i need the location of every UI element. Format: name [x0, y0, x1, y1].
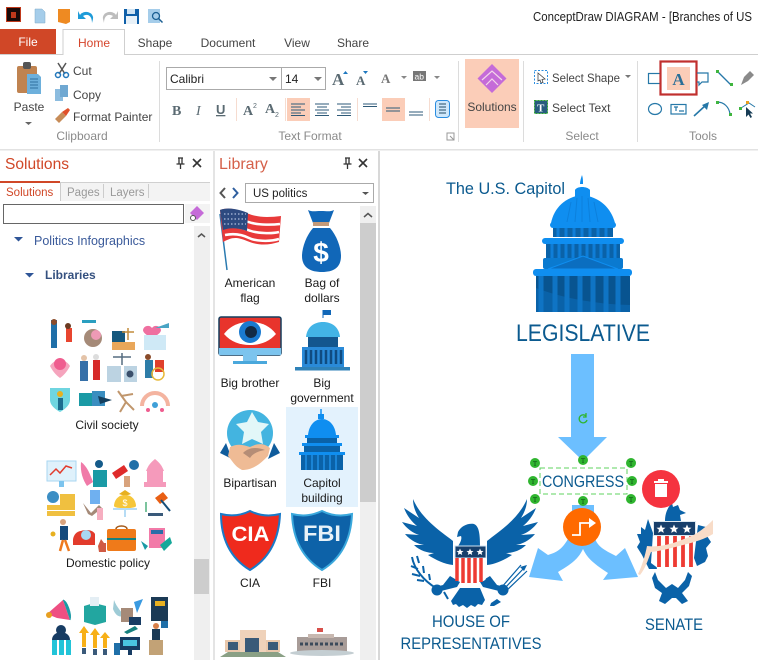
label: congress: CONGRESS — [542, 473, 624, 491]
icon: format painter — [55, 108, 70, 123]
text selection: congress: T — [629, 460, 634, 468]
item: federal building — [220, 630, 286, 657]
item: big government: Big — [313, 376, 331, 390]
font size selector — [282, 68, 326, 90]
grow and shrink font — [332, 70, 368, 89]
select group: Select Text — [552, 101, 611, 115]
item: capitol building selected: building — [301, 491, 343, 505]
label: house of representatives: REPRESENTATIVES — [400, 635, 542, 653]
scrollbar — [194, 226, 210, 660]
icon: copy — [55, 85, 68, 101]
icon: open book — [58, 9, 70, 24]
font colour and highlight — [381, 71, 440, 86]
item: FBI: FBI — [313, 576, 331, 590]
eagle head — [457, 524, 480, 546]
icon: ellipse tool — [648, 104, 662, 114]
panel: solutions — [0, 151, 213, 660]
icon: scissors — [56, 63, 68, 78]
grow and shrink font: A — [356, 73, 366, 88]
icon: arrow tool — [694, 102, 709, 116]
text selection: congress: T — [531, 478, 536, 486]
clipboard group: Clipboard — [56, 129, 108, 143]
library selector: US politics — [253, 188, 308, 200]
font colour and highlight: ab — [414, 72, 424, 82]
item: bag of dollars — [302, 210, 341, 305]
item: big brother — [219, 317, 281, 390]
icon: new document — [35, 9, 45, 23]
library: foreign policy set — [46, 597, 168, 655]
icon: rectangle tool — [648, 74, 660, 84]
navigation chevrons — [220, 188, 238, 198]
clipboard group: Cut — [73, 64, 92, 78]
style buttons: B — [172, 104, 181, 119]
panel tabs: Pages — [67, 187, 100, 199]
library: domestic policy: Domestic policy — [66, 556, 150, 570]
panel dividers — [213, 151, 380, 660]
library selector — [246, 184, 374, 202]
style buttons: U — [216, 102, 225, 117]
style buttons: I — [195, 104, 202, 119]
rotate handle — [579, 413, 587, 423]
item: bipartisan — [220, 410, 280, 490]
item: bag of dollars: $ — [313, 237, 329, 268]
clipboard group: Format Painter — [73, 110, 152, 124]
item: big government — [290, 310, 354, 405]
icon: redo — [103, 11, 118, 23]
clipboard group: Paste — [14, 100, 45, 114]
eagle arrows — [501, 565, 527, 592]
font selector — [166, 68, 282, 90]
tools group — [648, 62, 755, 143]
button: delete — [642, 470, 680, 508]
panel tabs: Solutions — [6, 187, 54, 199]
label: house of representatives — [400, 613, 542, 653]
eagle right wing — [487, 499, 538, 565]
item: big government: government — [290, 391, 354, 405]
item: bipartisan: Bipartisan — [223, 476, 277, 490]
clipboard group — [14, 62, 152, 143]
seal: senate — [637, 503, 713, 604]
tab: home: Home — [78, 36, 110, 50]
item: CIA: CIA — [240, 576, 260, 590]
item: big brother: Big brother — [221, 376, 279, 390]
library scrollbar — [360, 206, 376, 660]
grow and shrink font: A — [332, 70, 345, 89]
icon: callout tool — [697, 73, 708, 85]
text selection: congress — [528, 455, 637, 506]
icon: app — [6, 8, 20, 22]
canvas diagram — [400, 175, 713, 653]
text format group: Text Format — [278, 129, 342, 143]
item: capitol building selected: Capitol — [303, 476, 341, 490]
select group: Select — [565, 129, 599, 143]
file tab — [0, 29, 56, 54]
tools group: Tools — [689, 129, 717, 143]
icon: print preview — [148, 9, 162, 23]
arrows: congress to house and senate — [529, 505, 638, 581]
solutions button: Solutions — [467, 100, 517, 114]
ribbon tabs — [0, 29, 758, 54]
icon: undo — [78, 11, 93, 23]
tab: view: View — [284, 36, 310, 50]
style buttons: 2 — [253, 103, 257, 110]
font size selector: 14 — [285, 72, 299, 86]
library: civil society — [50, 319, 169, 432]
text format group — [166, 68, 454, 143]
ribbon — [0, 59, 758, 150]
library: civil society: Civil society — [75, 418, 139, 432]
panel tabs: Layers — [110, 187, 145, 199]
text selection: congress: T — [581, 498, 586, 506]
text selection: congress: T — [533, 496, 538, 504]
item: FBI — [292, 511, 352, 590]
font selector: Calibri — [170, 72, 204, 86]
panel: library — [219, 156, 376, 660]
item: american flag — [220, 209, 281, 305]
tab: share: Share — [337, 36, 369, 50]
style buttons: A — [243, 104, 254, 119]
icon: node tool — [739, 101, 755, 118]
arrow: legislative to congress — [558, 354, 607, 461]
item: capitol building selected — [286, 407, 358, 507]
search box — [4, 204, 210, 224]
pin and close — [176, 158, 201, 169]
item: bag of dollars: Bag of — [305, 276, 340, 290]
solutions heading: Solutions — [5, 156, 69, 173]
tree: libraries: Libraries — [45, 268, 96, 282]
clipboard group: Copy — [73, 88, 101, 102]
text selection: congress: T — [629, 496, 634, 504]
font colour and highlight: A — [381, 71, 391, 86]
tab: shape: Shape — [138, 36, 173, 50]
library heading: Library — [219, 156, 268, 173]
panel tabs — [0, 181, 210, 201]
icon: save — [124, 9, 139, 24]
icon: line tool — [716, 70, 733, 86]
style buttons — [172, 102, 279, 119]
tab: document: Document — [201, 36, 256, 50]
eagle tail and talons — [435, 576, 505, 591]
title bar — [6, 8, 752, 24]
style buttons: 2 — [275, 112, 279, 119]
alignment buttons — [287, 98, 423, 121]
eagle laurel branch — [411, 556, 448, 599]
item: treasury building — [290, 628, 354, 656]
item: CIA — [221, 511, 280, 590]
style buttons: A — [265, 102, 276, 117]
item: CIA: CIA — [232, 523, 270, 546]
icon: arc tool — [716, 101, 732, 116]
text selection: congress: T — [581, 457, 586, 465]
select group — [534, 70, 631, 143]
item: american flag: American — [225, 276, 275, 290]
icon: paste — [17, 62, 41, 94]
icon: text frame tool — [671, 104, 686, 114]
item: FBI: FBI — [303, 521, 341, 546]
eagle shield — [455, 546, 486, 558]
pin and close — [344, 158, 367, 169]
text tool highlighted: A — [672, 70, 685, 89]
icon: U.S. Capitol — [533, 175, 632, 312]
text selection: congress: T — [630, 478, 635, 486]
select group: Select Shape — [552, 71, 620, 85]
item: american flag: flag — [240, 291, 260, 305]
icon: select text: T — [537, 102, 545, 114]
text selection: congress: T — [533, 460, 538, 468]
item: bag of dollars: dollars — [304, 291, 340, 305]
library: domestic policy — [47, 459, 172, 570]
icon: text box margins — [436, 100, 450, 118]
icon: select shape — [534, 70, 548, 84]
library: domestic policy: $ — [122, 498, 128, 508]
file tab: File — [18, 35, 38, 49]
capitol caption: The U.S. Capitol — [446, 179, 565, 198]
label: house of representatives: HOUSE OF — [432, 613, 510, 631]
button: connector — [563, 508, 601, 546]
heading: legislative: LEGISLATIVE — [516, 320, 650, 347]
icon: pen tool — [741, 71, 754, 85]
solutions button — [465, 59, 519, 128]
label: senate: SENATE — [645, 616, 703, 634]
eagle: house of representatives — [402, 499, 538, 608]
tree: politics infographics: Politics Infographics — [34, 234, 145, 248]
eagle left wing — [402, 499, 453, 565]
